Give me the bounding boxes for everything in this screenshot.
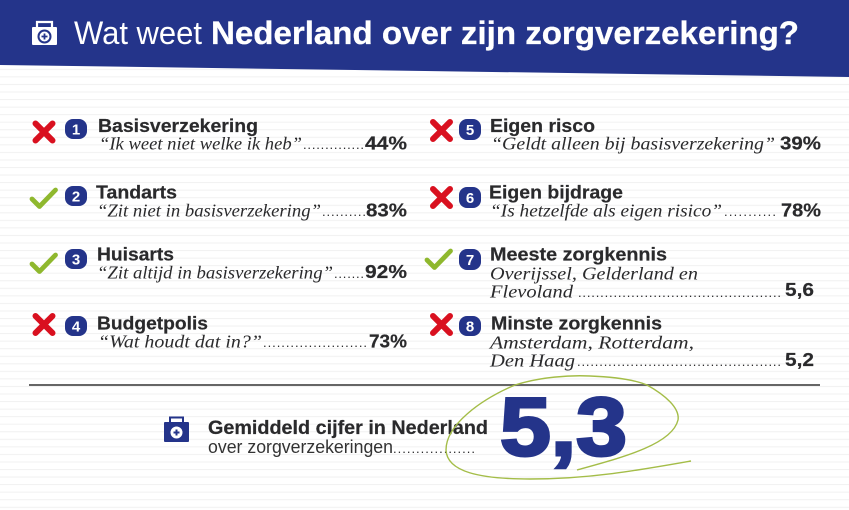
item 8: Minste zorgkennis: .............................................. xyxy=(577,354,781,369)
item 6: Eigen bijdrage: 78% xyxy=(781,200,821,220)
item 3: Huisarts xyxy=(32,244,407,282)
header banner xyxy=(0,0,849,77)
icon: green check xyxy=(32,255,56,272)
item 7: Meeste zorgkennis xyxy=(427,244,814,302)
item 5: Eigen risco xyxy=(433,115,821,154)
badge 8: 8 xyxy=(466,318,474,336)
item 4: Budgetpolis: Budgetpolis xyxy=(97,312,208,334)
icon: medical case xyxy=(164,418,189,442)
badge 7 xyxy=(459,249,481,270)
summary: average score: Gemiddeld cijfer in Nederland xyxy=(208,418,488,439)
item 1: Basisverzekering: .............. xyxy=(303,137,364,152)
badge 3 xyxy=(65,249,87,269)
badge 5 xyxy=(459,119,481,140)
item 6: Eigen bijdrage xyxy=(433,182,821,220)
title: Wat weet xyxy=(74,15,202,51)
item 1: Basisverzekering: 44% xyxy=(365,132,407,154)
item 2: Tandarts xyxy=(32,182,407,220)
item 6: Eigen bijdrage: Eigen bijdrage xyxy=(489,182,623,202)
item 6: Eigen bijdrage: ........... xyxy=(724,204,776,219)
badge 7: 7 xyxy=(466,252,474,269)
item 3: Huisarts: “Zit altijd in basisverzekering” xyxy=(97,262,333,282)
item 8: Minste zorgkennis: 5,2 xyxy=(785,349,814,370)
icon: green check xyxy=(427,251,450,268)
icon: red cross xyxy=(36,316,52,333)
icon: red cross xyxy=(36,124,52,140)
item 2: Tandarts: Tandarts xyxy=(96,182,177,202)
item 7: Meeste zorgkennis: Meeste zorgkennis xyxy=(490,244,667,264)
badge 6 xyxy=(459,187,481,208)
badge 1: 1 xyxy=(72,122,80,138)
item 2: Tandarts: 83% xyxy=(366,200,407,220)
item 6: Eigen bijdrage: “Is hetzelfde als eigen risico” xyxy=(490,200,722,220)
badge 4: 4 xyxy=(72,318,81,336)
item 4: Budgetpolis: ....................... xyxy=(263,335,367,350)
item 2: Tandarts: “Zit niet in basisverzekering” xyxy=(97,200,321,220)
item 8: Minste zorgkennis: Amsterdam, Rotterdam, xyxy=(489,332,694,352)
item 3: Huisarts: ....... xyxy=(334,266,364,281)
icon: green check xyxy=(32,190,56,206)
badge 5: 5 xyxy=(466,122,474,139)
icon: red cross xyxy=(433,316,450,333)
badge 2 xyxy=(65,186,87,206)
badge 8 xyxy=(459,316,481,336)
item 1: Basisverzekering: Basisverzekering xyxy=(98,115,258,136)
item 4: Budgetpolis: 73% xyxy=(369,330,407,352)
badge 6: 6 xyxy=(466,190,474,207)
item 7: Meeste zorgkennis: 5,6 xyxy=(785,279,814,300)
item 8: Minste zorgkennis: Minste zorgkennis xyxy=(491,312,662,334)
item 7: Meeste zorgkennis: Overijssel, Gelderland en xyxy=(490,264,698,284)
icon: medical case xyxy=(32,22,57,45)
item 5: Eigen risco: Eigen risco xyxy=(490,115,595,136)
item 8: Minste zorgkennis xyxy=(433,312,814,370)
title: Nederland over zijn zorgverzekering? xyxy=(211,15,799,51)
badge 4 xyxy=(65,316,87,336)
big number: 5,3 xyxy=(500,380,627,473)
icon: red cross xyxy=(433,122,450,139)
item 4: Budgetpolis: “Wat houdt dat in?” xyxy=(98,332,262,352)
badge 2: 2 xyxy=(72,188,80,206)
item 8: Minste zorgkennis: Den Haag xyxy=(489,350,575,370)
item 5: Eigen risco: “Geldt alleen bij basisverzekering” xyxy=(491,134,775,154)
green hand-drawn circle xyxy=(446,376,691,479)
item 7: Meeste zorgkennis: Flevoland xyxy=(489,282,574,302)
badge 3: 3 xyxy=(72,252,80,268)
item 1: Basisverzekering: “Ik weet niet welke ik heb” xyxy=(99,134,302,154)
item 3: Huisarts: 92% xyxy=(365,261,407,282)
summary: average score: over zorgverzekeringen xyxy=(208,437,393,457)
item 1: Basisverzekering xyxy=(36,115,407,154)
item 7: Meeste zorgkennis: .............................................. xyxy=(578,285,781,300)
item 5: Eigen risco: 39% xyxy=(780,132,821,154)
icon: red cross xyxy=(433,189,450,206)
item 3: Huisarts: Huisarts xyxy=(97,244,174,264)
summary: average score xyxy=(164,376,691,479)
summary: average score: .................. xyxy=(393,441,475,456)
item 4: Budgetpolis xyxy=(36,312,407,352)
item 2: Tandarts: .......... xyxy=(322,204,366,219)
badge 1 xyxy=(65,119,87,139)
